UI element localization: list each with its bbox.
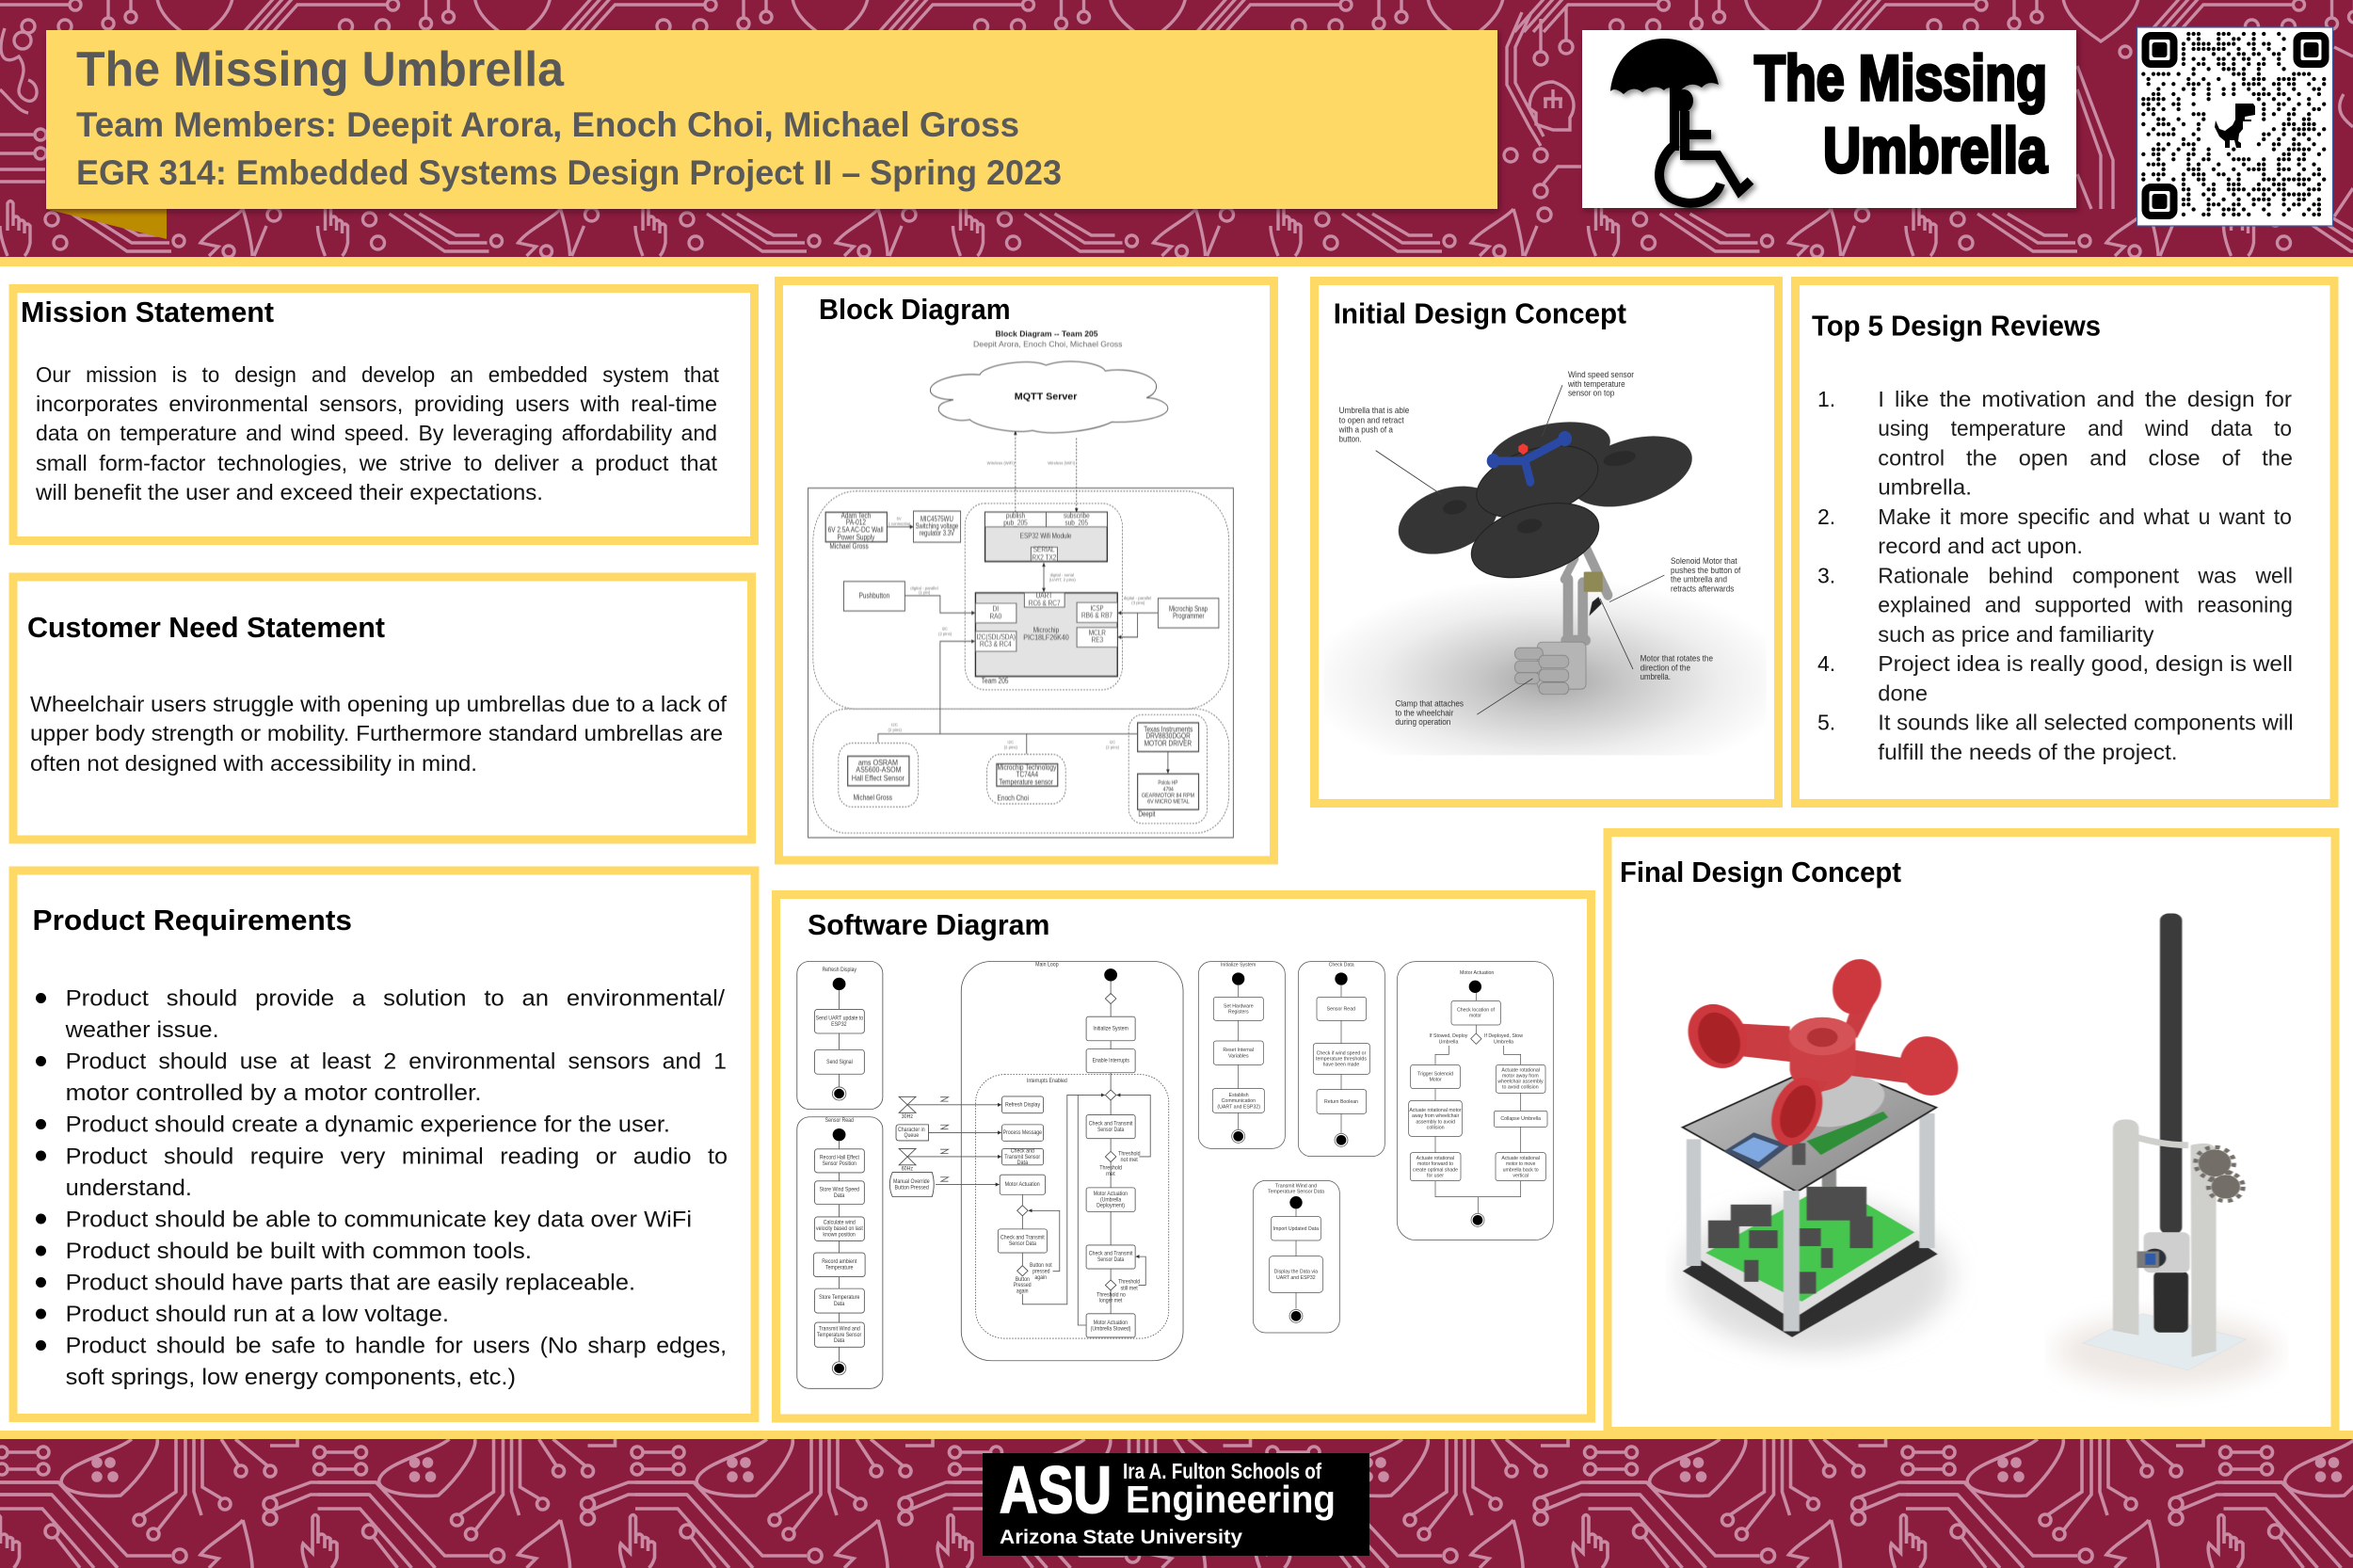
main loop flow: Enable Interrupts	[1093, 1058, 1130, 1064]
block diagram chart: Michael Gross	[854, 792, 892, 802]
motor actuation flow: motor	[1469, 1014, 1481, 1019]
callout labels: to the wheelchair	[1395, 708, 1453, 718]
sensor read flow: Sensor Position	[823, 1160, 856, 1167]
block diagram chart: TC74A4	[1016, 770, 1038, 779]
block diagram chart: Microchip	[1033, 626, 1059, 634]
main loop flow: again	[1016, 1288, 1029, 1295]
block diagram chart: 6V 2.5A AC-DC Wall	[828, 525, 884, 535]
block diagram chart: (2 pins)	[938, 632, 952, 636]
sensor read flow: Data	[834, 1301, 845, 1307]
clamp	[1514, 642, 1586, 695]
block diagram chart: publish	[1006, 511, 1025, 520]
block diagram chart: Michael Gross	[829, 542, 869, 551]
refresh display flow: Send UART update to	[816, 1016, 863, 1022]
panel: customer need statement	[13, 577, 751, 840]
review numbers: 1.	[1817, 387, 1835, 411]
motor actuation flow: create optimal shade	[1413, 1167, 1458, 1173]
motor actuation flow: Actuate rotational	[1417, 1156, 1454, 1161]
initialize system flow: Establish	[1229, 1093, 1249, 1098]
block diagram chart: RA0	[989, 612, 1001, 620]
check data flow: Check Data	[1329, 963, 1354, 968]
main loop flow: again	[1034, 1274, 1047, 1281]
block diagram chart: AS5600-ASOM	[856, 765, 901, 775]
motor actuation flow: assembly to avoid	[1416, 1119, 1455, 1125]
refresh display flow: Send Signal	[826, 1059, 853, 1065]
main loop flow: Motor Actuation	[1094, 1191, 1128, 1197]
requirements list: Product should run at a low voltage.	[66, 1302, 449, 1327]
review text: Make it more specific and what u want to	[1878, 504, 2292, 529]
review text: I like the motivation and the design for	[1878, 387, 2292, 411]
requirements list: Product should use at least 2 environmental sensors and 1	[66, 1048, 727, 1075]
left software flowcharts	[797, 961, 1183, 1388]
requirements list: motor controlled by a motor controller.	[66, 1080, 482, 1106]
motor actuation flow: umbrella back to	[1503, 1167, 1539, 1173]
block diagram chart: (1 pin)	[919, 590, 931, 595]
review numbers: 2.	[1817, 504, 1835, 529]
block diagram chart: 5V	[897, 516, 902, 521]
panel: product requirements	[13, 871, 755, 1417]
sensor read flow: Data	[834, 1337, 845, 1344]
motor actuation flow: away from wheelchair	[1412, 1113, 1459, 1119]
umbrella render with callouts	[1324, 370, 1767, 755]
sensor read flow: velocity based on last	[816, 1225, 863, 1232]
review numbers: 5.	[1817, 710, 1835, 734]
mission text: will benefit the user and exceed their expectations.	[35, 480, 543, 504]
sensor read flow: Data	[834, 1192, 845, 1199]
motor actuation flow: If Deployed, Stow	[1484, 1033, 1524, 1039]
refresh display flow: Refresh Display	[823, 967, 856, 973]
block diagram chart: (2 pins)	[1004, 744, 1017, 749]
motor actuation flow: Actuate rotational	[1501, 1068, 1540, 1074]
customer need text: Wheelchair users struggle with opening up umbrellas due to a lack of	[30, 692, 728, 716]
sensor read flow: Record ambient	[822, 1258, 856, 1265]
block diagram chart: PA-012	[846, 518, 866, 527]
block diagram chart: digital - serial	[1050, 572, 1074, 578]
refresh display flow: ESP32	[831, 1021, 847, 1028]
block diagram chart: 6V MICRO METAL	[1147, 799, 1190, 806]
main loop flow: Button not	[1030, 1262, 1052, 1269]
block diagram chart: I2C(SDL/SDA)	[976, 632, 1016, 642]
main loop flow: Data	[1017, 1160, 1028, 1166]
requirements list: Product should be able to communicate key data over WiFi	[66, 1207, 692, 1233]
interrupt sources: Button Pressed	[895, 1185, 929, 1192]
motor actuation flow: vertical	[1513, 1173, 1529, 1178]
block diagram chart: (2 pins)	[888, 728, 902, 732]
team members: Team Members: Deepit Arora, Enoch Choi, Michael Gross	[76, 105, 1019, 144]
block diagram chart: MQTT Server	[1015, 392, 1078, 402]
block diagram chart: Power Supply	[837, 533, 875, 541]
block diagram chart: Pololu HP	[1158, 780, 1178, 787]
block diagram chart: Wireless (WiFi)	[987, 460, 1015, 465]
sensor read flow: Temperature	[825, 1265, 854, 1271]
motor actuation flow: Umbrella	[1494, 1039, 1514, 1045]
main loop flow: Process Message	[1003, 1129, 1042, 1136]
block diagram chart: 4794	[1163, 787, 1174, 793]
block diagram chart: Temperature sensor	[999, 777, 1053, 787]
main loop flow: Threshold no	[1096, 1291, 1126, 1298]
callout lines	[1376, 385, 1664, 714]
QR modules	[2143, 34, 2324, 215]
block diagram chart: DI	[993, 604, 999, 614]
transmit data flow: UART and ESP32	[1276, 1275, 1316, 1281]
main loop flow: Check and Transmit	[1089, 1121, 1133, 1128]
motor actuation flow: Motor Actuation	[1460, 970, 1494, 976]
umbrella mount render	[2057, 913, 2277, 1386]
panel: top 5 design reviews	[1796, 280, 2334, 804]
heading: Product Requirements	[32, 904, 352, 936]
heading: Customer Need Statement	[27, 611, 385, 644]
callout labels: Wind speed sensor	[1568, 370, 1634, 379]
heading: Block Diagram	[819, 293, 1011, 326]
banner fold	[46, 209, 167, 239]
requirements list: Product should be built with common tools.	[66, 1239, 532, 1264]
block diagram chart: Deepit Arora, Enoch Choi, Michael Gross	[973, 340, 1123, 349]
top maroon circuit band	[0, 0, 2353, 257]
main loop flow: Initialize System	[1093, 1026, 1128, 1032]
motor actuation flow: for user	[1427, 1173, 1444, 1178]
mission text: data on temperature and wind speed. By leveraging affordability and	[36, 421, 717, 445]
initialize system flow: Variables	[1228, 1053, 1249, 1059]
requirements list: soft springs, low energy components, etc.)	[66, 1365, 516, 1390]
wind sensor	[1489, 434, 1570, 482]
main loop flow: Interrupts Enabled	[1027, 1078, 1067, 1084]
requirements list: Product should create a dynamic experience for the user.	[66, 1112, 670, 1137]
review text: record and act upon.	[1878, 534, 2083, 558]
ASU wordmark: ASU	[1000, 1453, 1112, 1527]
block diagram chart: I2C	[891, 722, 899, 728]
main loop flow: Sensor Data	[1009, 1240, 1036, 1247]
main loop flow: longer met	[1099, 1298, 1122, 1304]
transmit data flow: Display the Data via	[1274, 1270, 1319, 1275]
ASU Engineering logo: Engineering	[1126, 1478, 1336, 1521]
main loop flow: Threshold	[1118, 1151, 1141, 1157]
motor actuation flow: motor to move	[1506, 1161, 1535, 1167]
mission text: Our mission is to design and develop an embedded system that	[36, 362, 720, 387]
motor actuation flow: Actuate rotational	[1501, 1156, 1540, 1161]
interrupt sources: Manual Override	[893, 1178, 930, 1185]
main loop flow: Motor Actuation	[1005, 1181, 1040, 1188]
block diagram chart: GEARMOTOR 84 RPM	[1142, 793, 1194, 799]
review text: using temperature and wind data to	[1878, 416, 2292, 440]
block diagram chart: UART	[1036, 591, 1053, 600]
transmit data flow: Temperature Sensor Data	[1268, 1190, 1325, 1195]
review numbers	[1817, 387, 1835, 734]
initialize system flow: (UART and ESP32)	[1217, 1104, 1260, 1110]
callout labels: sensor on top	[1568, 388, 1614, 398]
panel: mission statement	[13, 288, 755, 540]
main loop flow: Pressed	[1014, 1282, 1032, 1288]
heading: Software Diagram	[808, 908, 1049, 941]
callout labels: Motor that rotates the	[1641, 653, 1713, 664]
callout labels: the umbrella and	[1671, 574, 1727, 584]
panel: initial design concept	[1314, 280, 1779, 804]
main loop flow: still met	[1120, 1285, 1138, 1291]
heading: Initial Design Concept	[1334, 297, 1626, 329]
requirements list: Product should require very minimal reading or audio to	[66, 1144, 728, 1169]
interrupt sources: Character in	[898, 1127, 925, 1133]
panel: final design concept	[1608, 832, 2335, 1431]
motor actuation flow: Trigger Solenoid	[1417, 1071, 1453, 1077]
check data flow: Sensor Read	[1327, 1006, 1355, 1012]
review text	[1878, 387, 2294, 764]
initialize system flow: Communication	[1222, 1098, 1256, 1104]
requirements list: Product should provide a solution to an environmental/	[66, 986, 725, 1011]
check data flow: Return Boolean	[1324, 1099, 1358, 1105]
block diagram chart: I2C	[1110, 740, 1116, 744]
motor actuation flow: motor away from	[1502, 1074, 1539, 1080]
block diagram chart: subscribe	[1064, 511, 1090, 520]
block diagram chart: Texas Instruments	[1144, 725, 1193, 733]
mission text: incorporates environmental sensors, providing users with real-time	[36, 392, 717, 416]
floor shadow	[1324, 568, 1767, 755]
block diagram chart: Deepit	[1138, 809, 1156, 819]
block diagram chart: Wireless (WiFi)	[1048, 460, 1075, 465]
block diagram chart: Enoch Choi	[998, 793, 1029, 803]
main loop flow: Threshold	[1118, 1279, 1140, 1286]
requirements list: understand.	[66, 1176, 192, 1201]
bullets	[36, 993, 46, 1351]
motor actuation flow: Collapse Umbrella	[1500, 1116, 1542, 1122]
block diagram chart: ams OSRAM	[858, 758, 898, 767]
interrupt sources: 30Hz	[902, 1113, 913, 1120]
transmit data flow	[1253, 1180, 1339, 1333]
QR dinosaur	[2215, 104, 2255, 148]
main loop flow: Refresh Display	[1005, 1101, 1041, 1108]
initialize system flow: Initialize System	[1221, 963, 1256, 968]
callout labels: with a push of a	[1338, 424, 1393, 435]
block diagram chart: RB6 & RB7	[1081, 611, 1112, 620]
block diagram chart: sub_205	[1064, 519, 1088, 527]
initialize system flow: Registers	[1228, 1010, 1249, 1016]
block diagram chart: RC6 & RC7	[1029, 599, 1061, 608]
block diagram chart: I2C	[1007, 740, 1015, 744]
mission text	[35, 362, 720, 504]
transmit data flow: Transmit Wind and	[1275, 1183, 1317, 1189]
logo text: The Missing	[1754, 42, 2047, 114]
main loop flow: Threshold	[1099, 1164, 1122, 1171]
main loop flow: Motor Actuation	[1094, 1320, 1128, 1326]
block diagram chart: Programmer	[1173, 611, 1205, 620]
requirements list	[65, 986, 728, 1390]
initialize system flow: Set Hardware	[1224, 1003, 1254, 1009]
block diagram chart: ICSP	[1090, 603, 1104, 613]
block diagram chart: digital - parallel	[910, 585, 938, 590]
heading: Top 5 Design Reviews	[1812, 309, 2101, 343]
main loop flow: (Umbrella Stowed)	[1091, 1326, 1131, 1333]
sensor read flow: Transmit Wind and	[819, 1326, 860, 1333]
block diagram chart: RC3 & RC4	[980, 640, 1012, 648]
callout labels	[1338, 370, 1741, 727]
requirements list: Product should have parts that are easily replaceable.	[66, 1271, 635, 1295]
block diagram chart: MOTOR DRIVER	[1144, 739, 1192, 748]
block diagram chart: (3 pins)	[1131, 600, 1145, 605]
review numbers: 4.	[1817, 651, 1835, 676]
main loop flow: Button	[1016, 1276, 1030, 1283]
project logo: Umbrella	[1823, 115, 2048, 186]
check data flow	[1298, 962, 1385, 1157]
block diagram chart: SERIAL	[1033, 545, 1055, 554]
block diagram chart: Microchip Technology	[998, 763, 1057, 772]
main loop flow: not met	[1120, 1157, 1138, 1163]
project logo	[1582, 30, 2076, 208]
review text: It sounds like all selected components will	[1878, 710, 2294, 734]
motor actuation flow: If Stowed, Deploy	[1430, 1033, 1467, 1039]
final render renders	[1680, 913, 2277, 1386]
motor actuation flow: Umbrella	[1439, 1039, 1459, 1045]
anemometer render	[1680, 956, 1963, 1352]
course line: EGR 314: Embedded Systems Design Project II – Spring 2023	[76, 153, 1062, 192]
block diagram chart: 1 connecting	[888, 521, 911, 526]
customer need text	[30, 692, 728, 776]
main loop flow: Deployment)	[1096, 1203, 1125, 1209]
refresh display flow	[797, 961, 883, 1110]
customer need text: often not designed with accessibility in mind.	[30, 751, 477, 776]
main loop flow: Sensor Data	[1097, 1256, 1125, 1263]
main loop flow: pressed	[1032, 1269, 1050, 1274]
block diagram chart: PIC18LF26K40	[1023, 632, 1069, 642]
block diagram chart: Adam Tech	[841, 511, 871, 520]
callout labels: retracts afterwards	[1671, 584, 1735, 594]
QR code	[2137, 27, 2332, 226]
sensor read flow: Store Temperature	[819, 1294, 860, 1301]
check data flow: Check if wind speed or	[1317, 1050, 1366, 1056]
sensor read flow: Sensor Read	[825, 1117, 854, 1124]
main loop flow	[961, 961, 1183, 1361]
right software flowcharts	[1198, 962, 1553, 1333]
block diagram chart: ESP32 Wifi Module	[1020, 532, 1071, 540]
callout labels: umbrella.	[1641, 672, 1671, 681]
umbrella discs	[1391, 412, 1699, 591]
interrupt sources: 60Hz	[902, 1165, 913, 1172]
main loop flow: Check and Transmit	[1089, 1251, 1133, 1257]
block diagram chart: RE3	[1092, 635, 1103, 645]
block diagram chart: RX2 TX2	[1032, 552, 1056, 562]
callout labels: Umbrella that is able	[1339, 406, 1409, 415]
block diagram chart	[808, 329, 1233, 838]
block diagram chart: pub_205	[1003, 519, 1028, 527]
main loop flow: Transmit Sensor	[1004, 1154, 1041, 1160]
callout labels: during operation	[1395, 717, 1450, 727]
block diagram chart: Microchip Snap	[1169, 604, 1208, 614]
sensor read flow: Store Wind Speed	[820, 1187, 859, 1193]
block diagram chart: I2C	[942, 626, 949, 632]
block diagram chart: Team 205	[982, 676, 1008, 685]
callout labels: button.	[1339, 434, 1362, 444]
block diagram chart: MCLR	[1089, 628, 1106, 637]
sensor read flow: known position	[823, 1231, 856, 1238]
bottom maroon circuit band	[0, 1439, 2353, 1568]
motor actuation flow: collision	[1427, 1125, 1445, 1130]
sensor read flow: Calculate wind	[824, 1220, 856, 1226]
main loop flow: Check and	[1011, 1148, 1034, 1154]
block diagram chart: Pushbutton	[859, 591, 889, 600]
mission text: small form-factor technologies, we strive to deliver a product that	[36, 451, 718, 475]
sensor read flow	[797, 1117, 883, 1388]
check data flow: have been made	[1323, 1063, 1359, 1068]
callout labels: Solenoid Motor that	[1671, 556, 1737, 566]
review text: done	[1878, 681, 1928, 706]
title banner	[46, 30, 1497, 239]
main loop flow: Sensor Data	[1097, 1127, 1125, 1133]
initialize system flow: Reset Internal	[1223, 1048, 1254, 1053]
initialize system flow	[1198, 962, 1285, 1148]
block diagram chart: Hall Effect Sensor	[852, 774, 904, 783]
callout labels: Clamp that attaches	[1395, 698, 1465, 709]
requirements list: Product should be safe to handle for users (No sharp edges,	[66, 1333, 727, 1359]
main loop flow: Main Loop	[1035, 962, 1059, 968]
top yellow stripe	[0, 257, 2353, 266]
main loop flow: (Umbrella	[1100, 1196, 1121, 1203]
motor actuation flow: Actuate rotational motor	[1409, 1108, 1462, 1113]
customer need text: upper body strength or mobility. Furthermore standard umbrellas are	[30, 721, 723, 745]
interrupt sources	[889, 1096, 1001, 1196]
interrupt sources: Queue	[904, 1132, 919, 1139]
QR finder marks	[2146, 36, 2325, 216]
callout labels: with temperature	[1567, 379, 1625, 389]
review text: Project idea is really good, design is well	[1878, 651, 2293, 676]
heading: Mission Statement	[21, 296, 274, 328]
school name: Ira A. Fulton Schools of	[1123, 1459, 1321, 1483]
callout labels: to open and retract	[1339, 415, 1404, 425]
sensor read flow: Temperature Sensor	[817, 1332, 862, 1338]
review text: Rationale behind component was well	[1878, 563, 2293, 587]
transmit data flow: Import Updated Data	[1273, 1226, 1320, 1232]
review text: control the open and close of the	[1878, 446, 2293, 471]
heading: Final Design Concept	[1620, 856, 1901, 888]
block diagram chart: DRV8830DGQR	[1145, 731, 1191, 741]
callout labels: direction of the	[1641, 663, 1690, 673]
review text: umbrella.	[1878, 474, 1972, 499]
title: The Missing Umbrella	[76, 42, 565, 97]
callout labels: pushes the button of	[1671, 566, 1741, 575]
sensor read flow: Record Hall Effect	[820, 1155, 859, 1160]
block diagram chart: Switching voltage	[916, 521, 958, 531]
review text: explained and supported with reasoning	[1878, 593, 2293, 617]
review text: such as price and familiarity	[1878, 622, 2154, 647]
block diagram chart: MIC4575WU	[920, 515, 953, 523]
block diagram chart: (2 pins)	[1106, 744, 1119, 749]
motor actuation flow: motor forward to	[1417, 1161, 1453, 1167]
motor actuation flow: Motor	[1430, 1078, 1442, 1083]
block diagram chart: Block Diagram -- Team 205	[995, 329, 1098, 339]
icon: umbrella wheelchair	[1610, 39, 1751, 203]
check data flow: temperature thresholds	[1316, 1056, 1367, 1062]
motor actuation flow: Check location of	[1457, 1007, 1495, 1013]
block diagram chart: digital - parallel	[1124, 596, 1151, 600]
block diagram chart: (UART, 2 pins)	[1049, 577, 1076, 583]
main loop flow: Check and Transmit	[1000, 1235, 1045, 1241]
block diagram chart: regulator 3.3V	[920, 529, 954, 537]
bottom yellow stripe	[0, 1431, 2353, 1439]
review text: fulfill the needs of the project.	[1878, 740, 2178, 764]
university name: Arizona State University	[1000, 1527, 1242, 1548]
main loop flow: met	[1106, 1171, 1115, 1177]
panel: software diagram	[776, 894, 1591, 1418]
motor actuation flow	[1397, 962, 1553, 1240]
support arms	[1564, 548, 1608, 640]
review numbers: 3.	[1817, 563, 1835, 587]
panel: block diagram	[779, 280, 1274, 860]
motor actuation flow: to avoid collision	[1502, 1085, 1539, 1091]
motor actuation flow: wheelchair assembly	[1497, 1080, 1544, 1085]
requirements list: weather issue.	[65, 1017, 219, 1043]
ASU Engineering logo	[983, 1453, 1369, 1556]
